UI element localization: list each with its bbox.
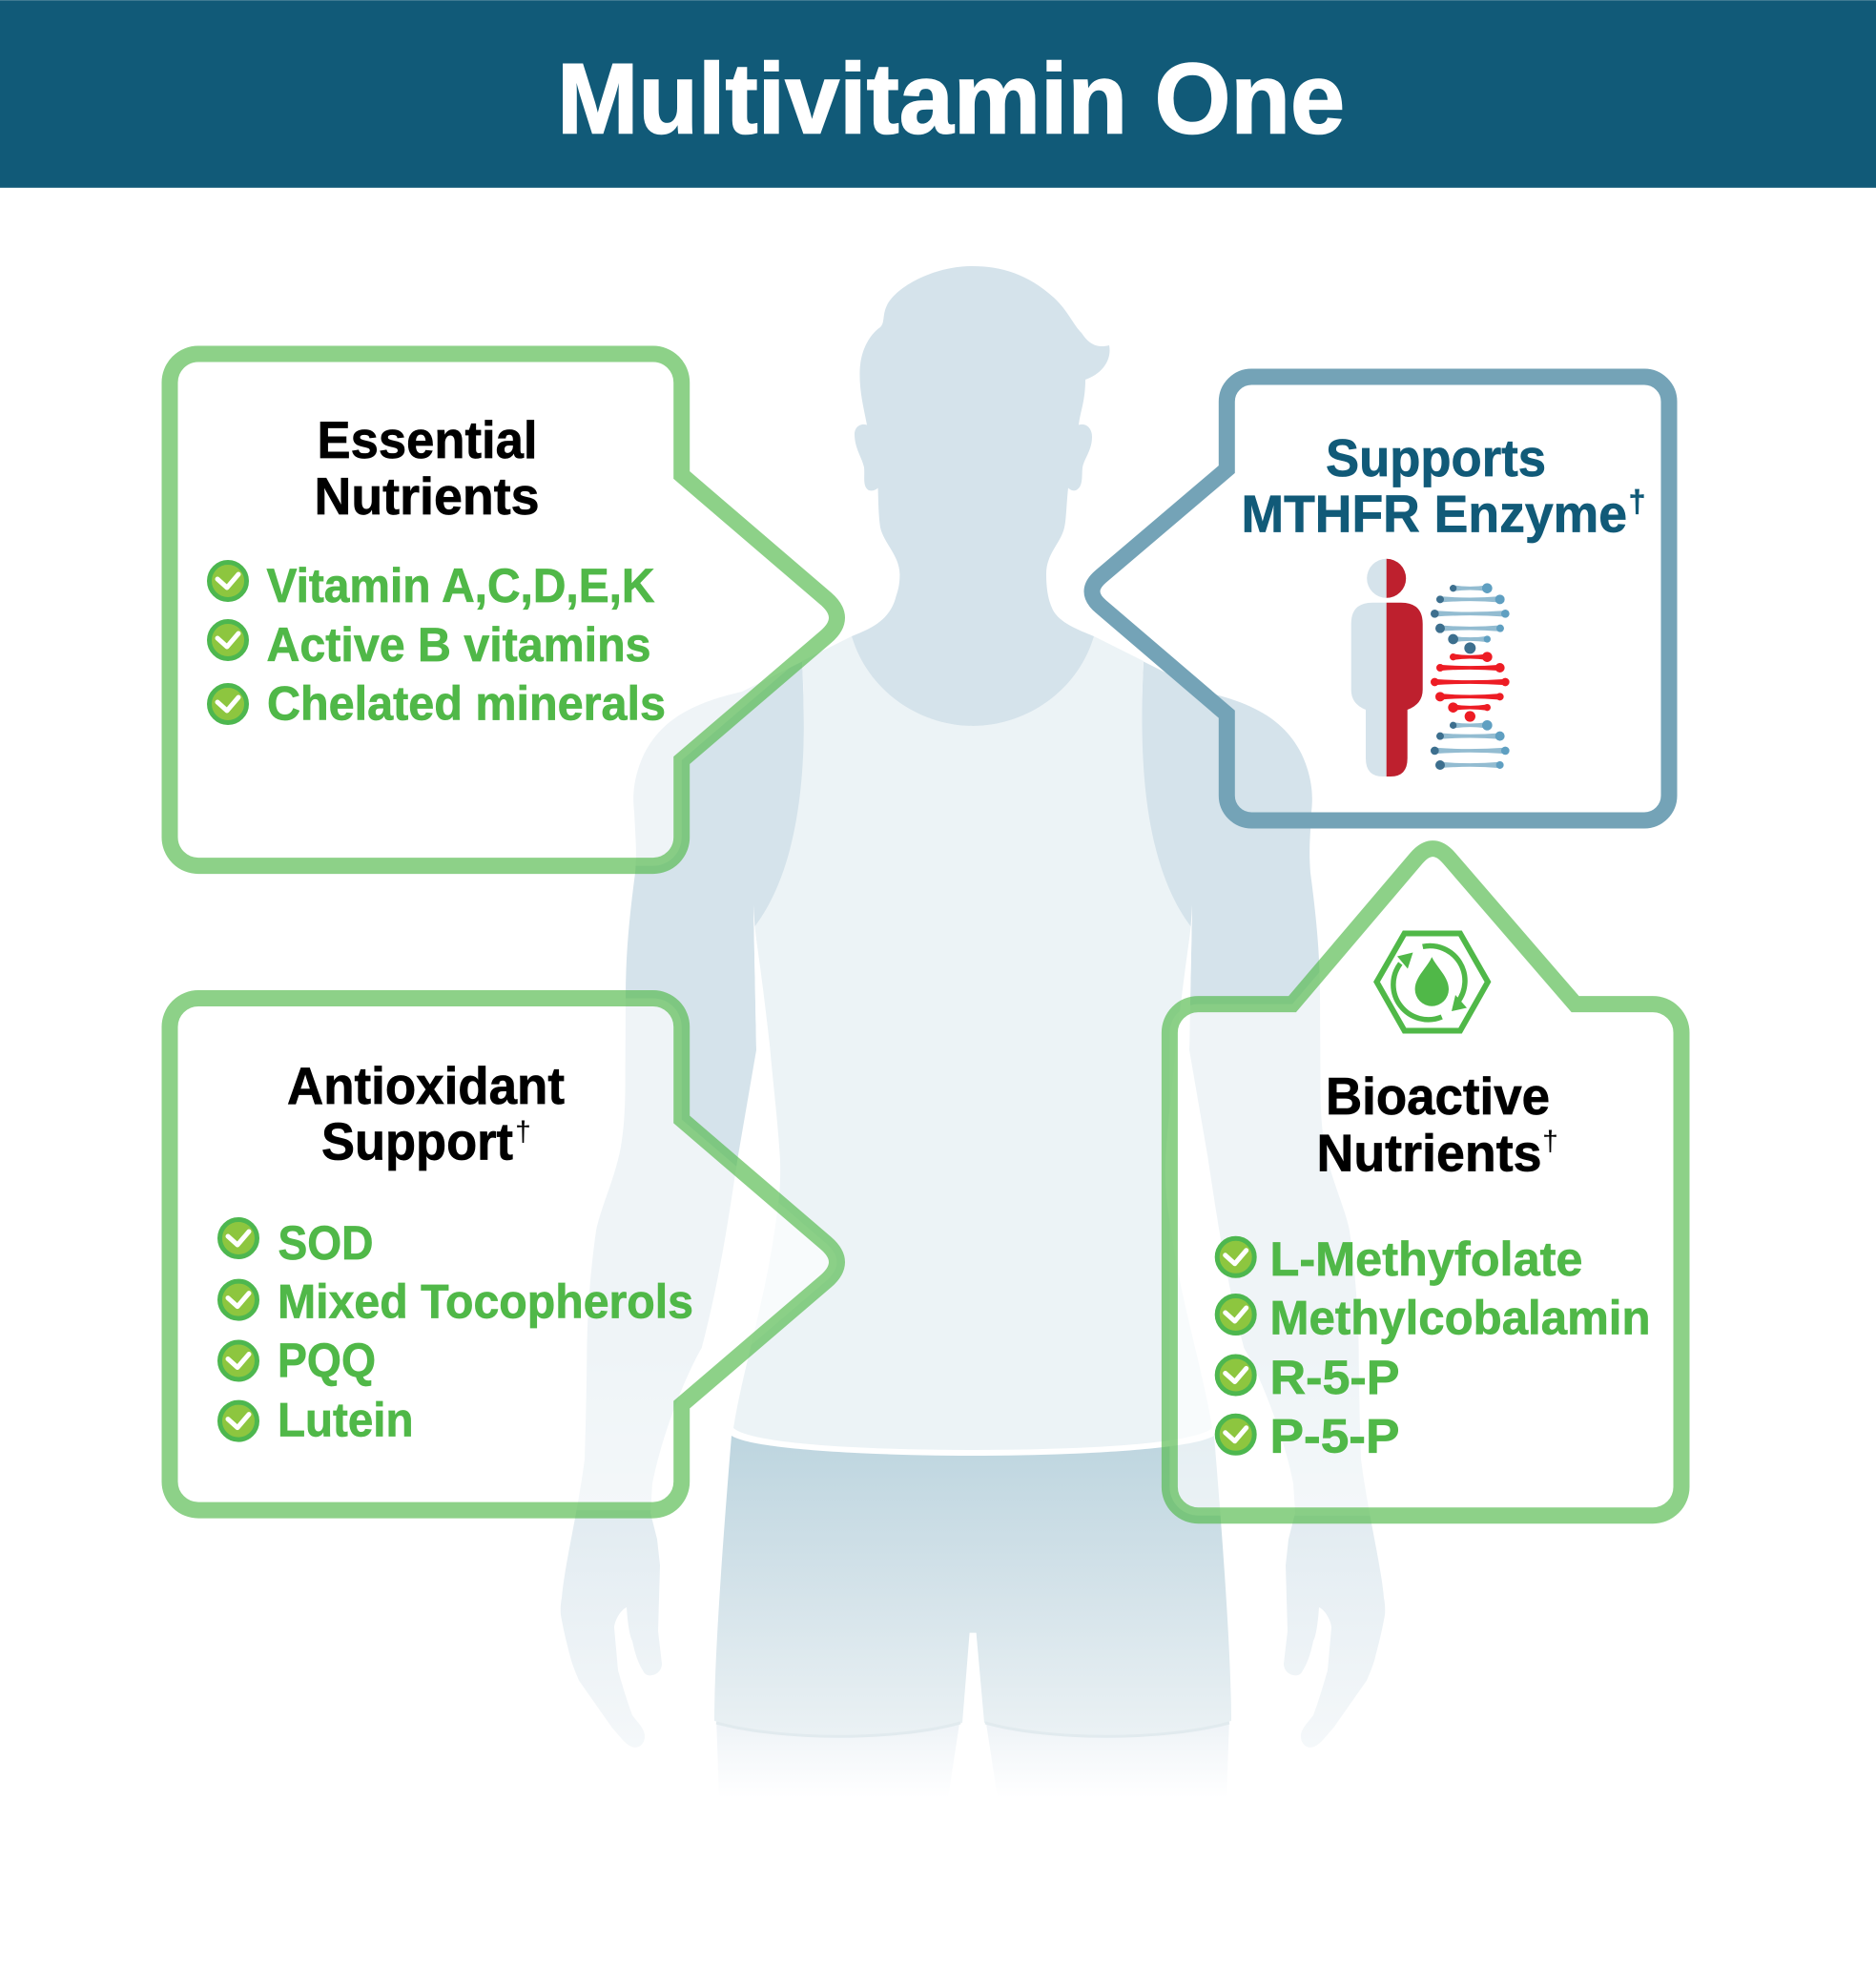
item: vitamin A,C,D,E,K: Vitamin A,C,D,E,K (267, 559, 654, 612)
item: L-methyfolate: L-Methyfolate (1270, 1232, 1583, 1286)
heading: Supports (1326, 428, 1546, 487)
left thigh (716, 1717, 960, 1798)
tank top (733, 636, 1212, 1450)
head and neck (852, 266, 1109, 726)
heading: † (1629, 485, 1645, 519)
heading (1316, 1066, 1558, 1183)
item: P-5-P (1217, 1410, 1400, 1463)
item: methylcobalamin: Methylcobalamin (1270, 1292, 1650, 1345)
shorts hems (716, 1723, 1229, 1736)
icon: person split in two colours (1351, 559, 1423, 777)
heading: MTHFR Enzyme (1242, 485, 1627, 544)
heading: Antioxidant (287, 1056, 565, 1115)
panel: essential nutrients (170, 354, 837, 866)
panel: supports MTHFR enzyme (1092, 377, 1669, 820)
icon: hexagon with recycling arrows and drop (1377, 933, 1488, 1030)
header banner (0, 0, 1876, 188)
item: chelated minerals: Chelated minerals (267, 677, 666, 731)
right arm (1142, 662, 1385, 1748)
callout outline (170, 354, 837, 866)
armpit gap right (1177, 905, 1192, 1049)
panel: bioactive nutrients (1169, 849, 1681, 1516)
heading (287, 1056, 565, 1171)
item: lutein (219, 1394, 414, 1447)
heading: Support (321, 1112, 513, 1171)
right thigh (985, 1717, 1229, 1798)
item: R-5-P (1217, 1351, 1400, 1404)
item: mixed tocopherols: Mixed Tocopherols (278, 1274, 693, 1328)
callout outline (1169, 849, 1681, 1516)
heading (315, 410, 540, 526)
icon: DNA strand (1431, 583, 1510, 770)
callout outline (170, 998, 837, 1510)
heading (1242, 428, 1645, 544)
item: PQQ: PQQ (278, 1334, 376, 1387)
human body silhouette (561, 266, 1385, 1798)
heading: Nutrients (315, 466, 540, 526)
heading: † (1542, 1126, 1558, 1157)
armpit gap left (753, 905, 769, 1049)
heading: † (515, 1116, 531, 1148)
item: R-5-P: R-5-P (1270, 1351, 1400, 1404)
heading: Essential (317, 410, 538, 469)
left arm (561, 662, 804, 1748)
item: SOD (219, 1216, 374, 1270)
panel: antioxidant support (170, 998, 837, 1510)
item: SOD: SOD (278, 1216, 374, 1270)
shorts (714, 1436, 1231, 1736)
heading: Bioactive (1326, 1066, 1550, 1126)
heading: Nutrients (1316, 1124, 1541, 1183)
item: active B vitamins: Active B vitamins (267, 618, 650, 672)
item: PQQ (219, 1334, 376, 1387)
item: P-5-P: P-5-P (1270, 1410, 1400, 1463)
title: Multivitamin One (557, 44, 1345, 155)
item: lutein: Lutein (278, 1394, 414, 1447)
callout outline (1092, 377, 1669, 820)
